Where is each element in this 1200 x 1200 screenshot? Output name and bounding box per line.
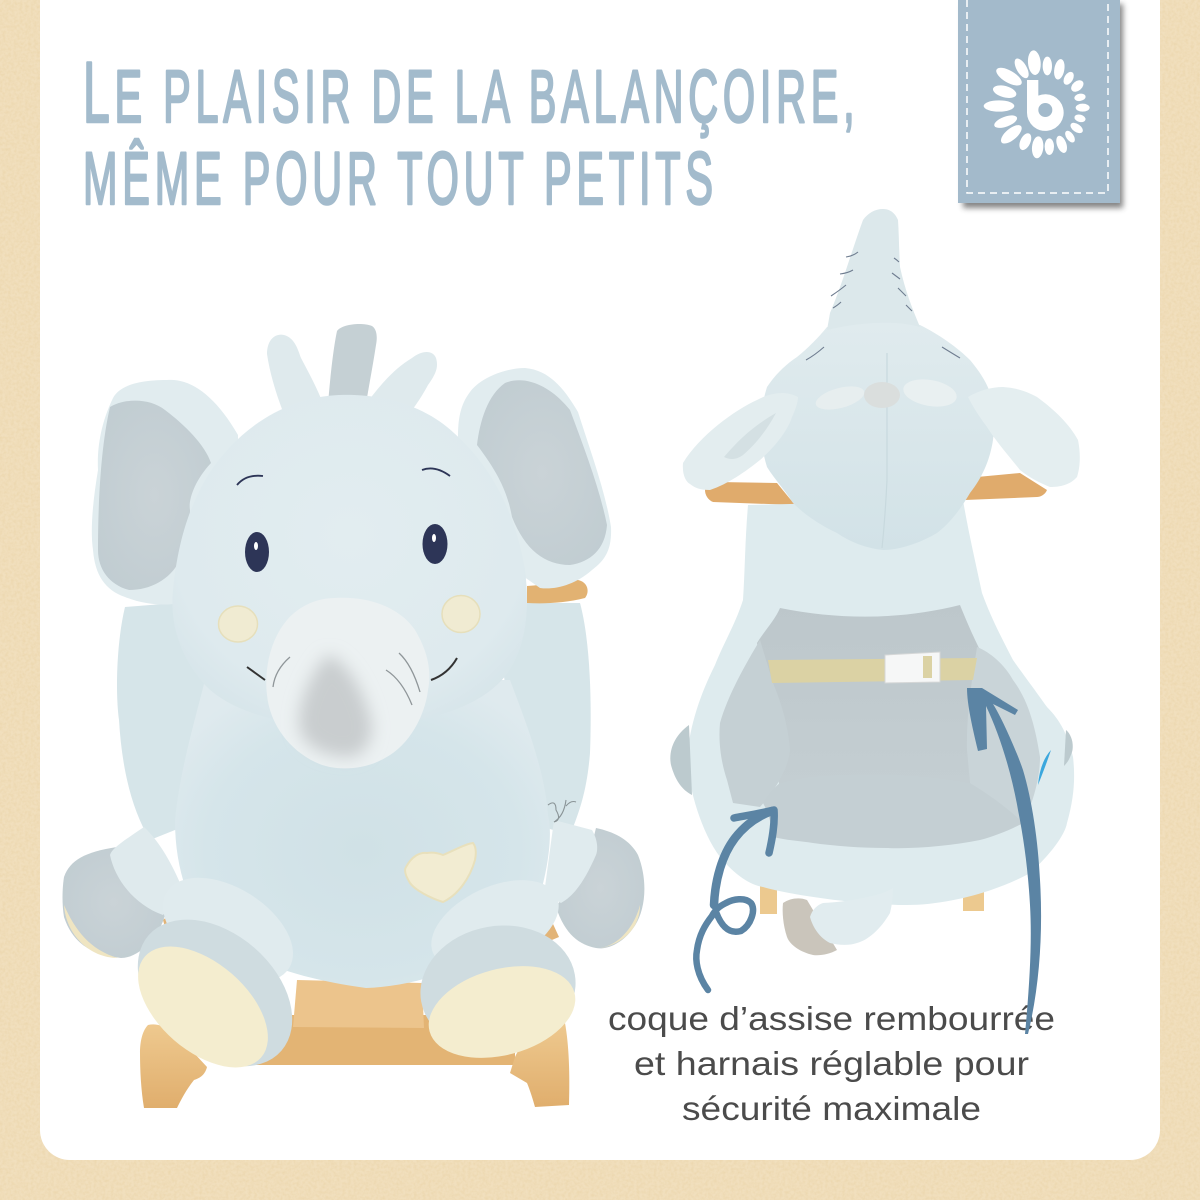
ear right — [458, 368, 611, 588]
handle — [527, 580, 588, 603]
caption: et harnais réglable pour — [634, 1046, 1029, 1083]
seat cushion — [763, 774, 1023, 848]
back leg right — [545, 820, 644, 948]
wooden feet — [760, 885, 984, 914]
caption: sécurité maximale — [682, 1091, 981, 1128]
backrest — [757, 605, 980, 790]
eyes — [245, 524, 448, 572]
title: MÊME POUR TOUT PETITS — [83, 137, 713, 220]
tail tuft — [783, 898, 837, 955]
tail — [810, 888, 893, 945]
torso — [175, 680, 550, 988]
right armrest — [967, 647, 1040, 823]
right elephant: rear view with seat and harness — [670, 209, 1080, 955]
right ear — [968, 387, 1080, 487]
left armrest — [719, 640, 790, 807]
title: LE PLAISIR DE LA BALANÇOIRE, — [83, 44, 855, 141]
autograph — [548, 800, 576, 822]
eyebrows — [237, 468, 450, 485]
icon: brand flower logo — [984, 50, 1090, 159]
title — [83, 44, 855, 220]
wooden rocker base — [140, 897, 569, 1108]
head — [761, 322, 994, 550]
heart patch — [405, 843, 476, 902]
harness strap — [768, 658, 977, 683]
brand tag — [958, 0, 1123, 208]
left ear — [683, 393, 798, 490]
back leg left — [62, 827, 180, 958]
ear left — [92, 380, 238, 605]
blue label — [1038, 750, 1051, 785]
tusk tufts — [813, 376, 959, 414]
front leg left — [109, 856, 321, 1096]
wooden handles — [705, 473, 1047, 505]
hair tufts — [267, 324, 437, 419]
arrow: to seat shell — [696, 810, 774, 990]
head — [172, 395, 527, 727]
trunk raised — [827, 209, 920, 330]
trunk wrinkles — [806, 252, 960, 360]
trunk — [266, 598, 429, 768]
caption: coque d’assise rembourrée — [608, 1001, 1055, 1038]
cheeks — [218, 596, 480, 642]
rear body sides — [117, 603, 210, 840]
smile — [247, 658, 457, 680]
head seam — [882, 353, 887, 548]
front leg right — [410, 862, 586, 1073]
side bump right — [1064, 730, 1073, 766]
buckle — [885, 652, 940, 683]
left elephant: front view on wooden rocker — [62, 324, 644, 1108]
caption — [608, 1001, 1055, 1128]
neck and body — [687, 500, 1074, 905]
arrow: to harness — [967, 688, 1041, 1034]
side bump left — [670, 725, 692, 795]
